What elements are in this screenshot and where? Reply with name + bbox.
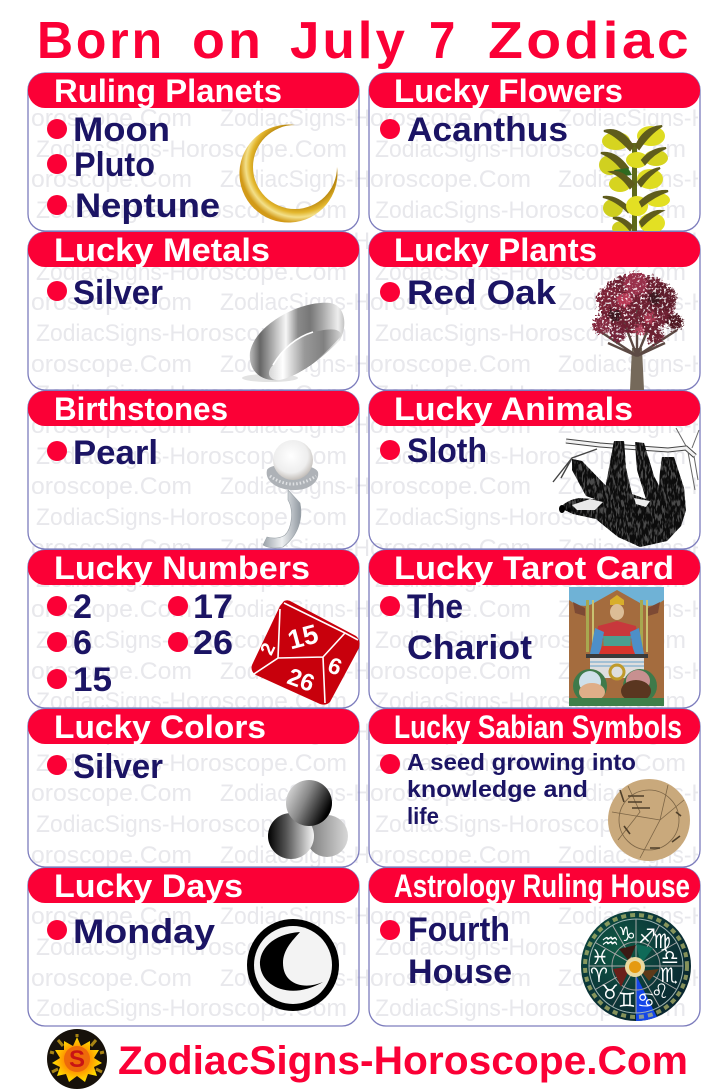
watermark: ZodiacSigns-H bbox=[558, 903, 708, 930]
panel: lucky sabian symbols bbox=[369, 709, 700, 867]
watermark: oroscope.Com bbox=[186, 443, 347, 470]
watermark: oroscope.Com bbox=[525, 320, 686, 347]
icon: red dice: 2 bbox=[257, 640, 280, 658]
footer logo: S bbox=[69, 1046, 85, 1073]
watermark: ZodiacSigns-H bbox=[36, 504, 186, 531]
heading: lucky flowers: Lucky Flowers bbox=[394, 73, 623, 109]
watermark: ZodiacSigns-H bbox=[220, 596, 370, 623]
watermark: ZodiacSigns-H bbox=[220, 903, 370, 930]
panel: birthstones bbox=[28, 391, 359, 549]
heading: lucky colors: Lucky Colors bbox=[54, 709, 266, 745]
panel: lucky colors bbox=[28, 709, 359, 867]
panel: lucky sabian symbols: life bbox=[407, 803, 439, 829]
heading: lucky metals: Lucky Metals bbox=[54, 232, 270, 268]
watermark: oroscope.Com bbox=[525, 504, 686, 531]
watermark: oroscope.Com bbox=[186, 566, 347, 593]
icon: zodiac wheel: ♍ bbox=[653, 929, 671, 953]
watermark: oroscope.Com bbox=[370, 351, 531, 378]
watermark: oroscope.Com bbox=[525, 688, 686, 715]
watermark: oroscope.Com bbox=[370, 780, 531, 807]
watermark: oroscope.Com bbox=[186, 811, 347, 838]
watermark: oroscope.Com bbox=[31, 658, 192, 685]
icon: sloth on a branch bbox=[553, 428, 699, 547]
icon: zodiac wheel: ♏ bbox=[660, 963, 678, 987]
panel: lucky numbers: 17 bbox=[193, 588, 233, 626]
panel: ruling planets: Moon bbox=[73, 111, 170, 149]
watermark: oroscope.Com bbox=[525, 259, 686, 286]
watermark: ZodiacSigns-H bbox=[36, 197, 186, 224]
watermark: ZodiacSigns-H bbox=[558, 105, 708, 132]
watermark: ZodiacSigns-H bbox=[220, 105, 370, 132]
panel: astrology ruling house: House bbox=[408, 953, 512, 991]
panel: lucky tarot card bbox=[369, 550, 700, 708]
watermark: ZodiacSigns-H bbox=[375, 504, 525, 531]
watermark: ZodiacSigns-H bbox=[558, 473, 708, 500]
watermark: ZodiacSigns-H bbox=[220, 289, 370, 316]
title: 7 bbox=[429, 12, 458, 70]
watermark: oroscope.Com bbox=[525, 873, 686, 900]
watermark: oroscope.Com bbox=[31, 105, 192, 132]
watermark: oroscope.Com bbox=[186, 259, 347, 286]
title bbox=[37, 12, 692, 70]
panel: lucky plants bbox=[369, 232, 700, 390]
watermark: ZodiacSigns-H bbox=[558, 535, 708, 562]
panel: lucky numbers: 15 bbox=[73, 661, 112, 699]
panel: ruling planets bbox=[28, 73, 359, 231]
panel: lucky numbers: 26 bbox=[193, 624, 233, 662]
watermark: ZodiacSigns-H bbox=[36, 750, 186, 777]
heading: lucky plants: Lucky Plants bbox=[394, 232, 597, 268]
watermark: ZodiacSigns-H bbox=[36, 136, 186, 163]
watermark: oroscope.Com bbox=[186, 381, 347, 408]
watermark: oroscope.Com bbox=[31, 289, 192, 316]
watermark: ZodiacSigns-H bbox=[220, 719, 370, 746]
icon: zodiac wheel: ♈ bbox=[590, 963, 608, 987]
icon: zodiac wheel: ♋ bbox=[637, 988, 655, 1012]
watermark: ZodiacSigns-H bbox=[558, 289, 708, 316]
title: July bbox=[290, 12, 408, 70]
panel: lucky numbers bbox=[28, 550, 360, 708]
icon: zodiac wheel: ♎ bbox=[661, 945, 679, 969]
watermark: oroscope.Com bbox=[525, 995, 686, 1022]
watermark: oroscope.Com bbox=[370, 658, 531, 685]
watermark: ZodiacSigns-H bbox=[36, 627, 186, 654]
watermark: ZodiacSigns-H bbox=[36, 811, 186, 838]
panel: lucky metals bbox=[28, 232, 359, 390]
icon: red dice bbox=[252, 600, 360, 705]
icon: acanthus flower bbox=[599, 126, 670, 235]
watermark: ZodiacSigns-H bbox=[36, 934, 186, 961]
watermark: oroscope.Com bbox=[31, 412, 192, 439]
panel: lucky animals bbox=[369, 391, 700, 549]
watermark: ZodiacSigns-H bbox=[375, 688, 525, 715]
watermark: oroscope.Com bbox=[525, 443, 686, 470]
footer website text: ZodiacSigns-Horoscope.Com bbox=[118, 1039, 688, 1083]
panel: lucky numbers: 6 bbox=[73, 624, 92, 662]
title: on bbox=[192, 12, 264, 70]
watermark: ZodiacSigns-H bbox=[375, 443, 525, 470]
icon: zodiac wheel: ♑ bbox=[618, 922, 636, 946]
heading: lucky animals: Lucky Animals bbox=[394, 391, 633, 427]
heading: ruling planets: Ruling Planets bbox=[54, 73, 282, 109]
panel: lucky sabian symbols: A seed growing into bbox=[407, 749, 636, 775]
watermark: oroscope.Com bbox=[186, 688, 347, 715]
icon: zodiac wheel: ♌ bbox=[651, 979, 669, 1003]
watermark: oroscope.Com bbox=[370, 965, 531, 992]
watermark: ZodiacSigns-H bbox=[375, 873, 525, 900]
watermark: ZodiacSigns-H bbox=[36, 381, 186, 408]
watermark: oroscope.Com bbox=[525, 136, 686, 163]
panel: lucky sabian symbols: knowledge and bbox=[407, 776, 588, 802]
footer logo bbox=[47, 1029, 107, 1089]
heading: lucky tarot card: Lucky Tarot Card bbox=[394, 550, 674, 586]
watermark: oroscope.Com bbox=[370, 412, 531, 439]
panel: ruling planets: Neptune bbox=[75, 187, 220, 225]
watermark: ZodiacSigns-H bbox=[558, 166, 708, 193]
watermark: ZodiacSigns-H bbox=[220, 473, 370, 500]
icon: chariot tarot card bbox=[569, 587, 664, 706]
watermark: oroscope.Com bbox=[31, 903, 192, 930]
watermark: ZodiacSigns-H bbox=[375, 811, 525, 838]
watermark: ZodiacSigns-H bbox=[220, 166, 370, 193]
watermark: oroscope.Com bbox=[31, 965, 192, 992]
watermark: oroscope.Com bbox=[186, 873, 347, 900]
watermark: oroscope.Com bbox=[186, 934, 347, 961]
panel: lucky days: Monday bbox=[73, 913, 215, 951]
watermark: ZodiacSigns-H bbox=[375, 750, 525, 777]
watermark: ZodiacSigns-H bbox=[558, 965, 708, 992]
panel: lucky tarot card: Chariot bbox=[407, 629, 532, 667]
icon: zodiac wheel: ♓ bbox=[591, 945, 609, 969]
watermark: ZodiacSigns-H bbox=[375, 934, 525, 961]
icon: zodiac wheel: ♐ bbox=[638, 924, 656, 948]
icon: red dice: 6 bbox=[325, 652, 345, 680]
watermark: ZodiacSigns-H bbox=[220, 842, 370, 869]
icon: red dice: 15 bbox=[285, 619, 321, 655]
watermark: oroscope.Com bbox=[370, 842, 531, 869]
watermark: oroscope.Com bbox=[525, 197, 686, 224]
heading: birthstones: Birthstones bbox=[54, 391, 228, 427]
watermark: ZodiacSigns-H bbox=[36, 688, 186, 715]
watermark: oroscope.Com bbox=[370, 535, 531, 562]
watermark: ZodiacSigns-H bbox=[36, 995, 186, 1022]
panel: lucky animals: Sloth bbox=[407, 432, 487, 470]
watermark: ZodiacSigns-H bbox=[558, 842, 708, 869]
heading: lucky numbers: Lucky Numbers bbox=[54, 550, 310, 586]
title: Zodiac bbox=[488, 12, 692, 70]
watermark: oroscope.Com bbox=[370, 473, 531, 500]
watermark: ZodiacSigns-H bbox=[220, 228, 370, 255]
watermark: ZodiacSigns-H bbox=[375, 566, 525, 593]
watermark: oroscope.Com bbox=[31, 535, 192, 562]
panel: astrology ruling house: Fourth bbox=[408, 911, 510, 949]
panel: lucky metals: Silver bbox=[73, 274, 163, 312]
watermark: ZodiacSigns-H bbox=[220, 780, 370, 807]
watermark: ZodiacSigns-H bbox=[558, 658, 708, 685]
watermark: oroscope.Com bbox=[525, 627, 686, 654]
icon: astrology chart bbox=[608, 779, 690, 861]
panel: lucky flowers: Acanthus bbox=[407, 111, 568, 149]
watermark: oroscope.Com bbox=[186, 136, 347, 163]
watermark: oroscope.Com bbox=[31, 842, 192, 869]
watermark: ZodiacSigns-H bbox=[36, 566, 186, 593]
watermark: ZodiacSigns-H bbox=[558, 596, 708, 623]
watermark: ZodiacSigns-H bbox=[375, 381, 525, 408]
watermark: ZodiacSigns-H bbox=[558, 228, 708, 255]
panel: astrology ruling house bbox=[369, 868, 700, 1026]
watermark: ZodiacSigns-H bbox=[375, 627, 525, 654]
panel: birthstones: Pearl bbox=[73, 434, 158, 472]
watermark: ZodiacSigns-H bbox=[558, 780, 708, 807]
watermark: oroscope.Com bbox=[31, 473, 192, 500]
watermark: oroscope.Com bbox=[186, 504, 347, 531]
watermark: oroscope.Com bbox=[370, 719, 531, 746]
watermark: oroscope.Com bbox=[370, 228, 531, 255]
heading: lucky days: Lucky Days bbox=[54, 868, 243, 904]
watermark: oroscope.Com bbox=[370, 596, 531, 623]
watermark: ZodiacSigns-H bbox=[375, 259, 525, 286]
icon: zodiac wheel: ♉ bbox=[601, 980, 619, 1004]
watermark: ZodiacSigns-H bbox=[36, 320, 186, 347]
watermark: ZodiacSigns-H bbox=[375, 136, 525, 163]
icon: zodiac wheel: ♒ bbox=[601, 929, 619, 953]
icon: silver ring bbox=[242, 303, 344, 382]
watermark: ZodiacSigns-H bbox=[36, 259, 186, 286]
watermark: oroscope.Com bbox=[370, 289, 531, 316]
panel: lucky numbers: 2 bbox=[73, 588, 92, 626]
watermark: oroscope.Com bbox=[31, 166, 192, 193]
icon: gold crescent moon bbox=[239, 125, 337, 223]
watermark: ZodiacSigns-H bbox=[375, 320, 525, 347]
watermark: ZodiacSigns-H bbox=[36, 443, 186, 470]
panel: lucky days bbox=[28, 868, 359, 1026]
icon: gray spheres bbox=[268, 780, 348, 859]
watermark: ZodiacSigns-H bbox=[36, 873, 186, 900]
watermark: oroscope.Com bbox=[186, 995, 347, 1022]
icon: zodiac wheel bbox=[581, 911, 691, 1021]
watermark: oroscope.Com bbox=[186, 320, 347, 347]
watermark: oroscope.Com bbox=[186, 627, 347, 654]
panel: lucky flowers bbox=[369, 73, 700, 235]
watermark: oroscope.Com bbox=[525, 381, 686, 408]
icon: pearl ring bbox=[263, 440, 318, 548]
watermark: oroscope.Com bbox=[31, 596, 192, 623]
watermark: oroscope.Com bbox=[370, 903, 531, 930]
watermark: oroscope.Com bbox=[31, 719, 192, 746]
watermark: ZodiacSigns-H bbox=[220, 658, 370, 685]
watermark: oroscope.Com bbox=[525, 811, 686, 838]
watermark bbox=[31, 105, 708, 1022]
watermark: ZodiacSigns-H bbox=[220, 412, 370, 439]
watermark: ZodiacSigns-H bbox=[558, 719, 708, 746]
watermark: ZodiacSigns-H bbox=[220, 351, 370, 378]
panel: lucky colors: Silver bbox=[73, 748, 163, 786]
watermark: oroscope.Com bbox=[370, 105, 531, 132]
watermark: oroscope.Com bbox=[525, 750, 686, 777]
panel: lucky tarot card: The bbox=[407, 588, 463, 626]
watermark: oroscope.Com bbox=[525, 934, 686, 961]
icon: black moon badge bbox=[247, 919, 339, 1011]
watermark: ZodiacSigns-H bbox=[220, 965, 370, 992]
watermark: oroscope.Com bbox=[186, 197, 347, 224]
watermark: oroscope.Com bbox=[31, 228, 192, 255]
watermark: oroscope.Com bbox=[370, 166, 531, 193]
watermark: ZodiacSigns-H bbox=[558, 351, 708, 378]
watermark: oroscope.Com bbox=[31, 780, 192, 807]
title: Born bbox=[37, 12, 165, 70]
watermark: ZodiacSigns-H bbox=[558, 412, 708, 439]
icon: red oak tree bbox=[593, 272, 683, 390]
watermark: oroscope.Com bbox=[31, 351, 192, 378]
icon: red dice: 26 bbox=[284, 663, 318, 698]
watermark: oroscope.Com bbox=[186, 750, 347, 777]
panel: ruling planets: Pluto bbox=[74, 146, 155, 184]
icon: zodiac wheel: ♊ bbox=[618, 988, 636, 1012]
panel: lucky plants: Red Oak bbox=[407, 274, 556, 312]
watermark: oroscope.Com bbox=[525, 566, 686, 593]
watermark: ZodiacSigns-H bbox=[375, 995, 525, 1022]
watermark: ZodiacSigns-H bbox=[375, 197, 525, 224]
watermark: ZodiacSigns-H bbox=[220, 535, 370, 562]
